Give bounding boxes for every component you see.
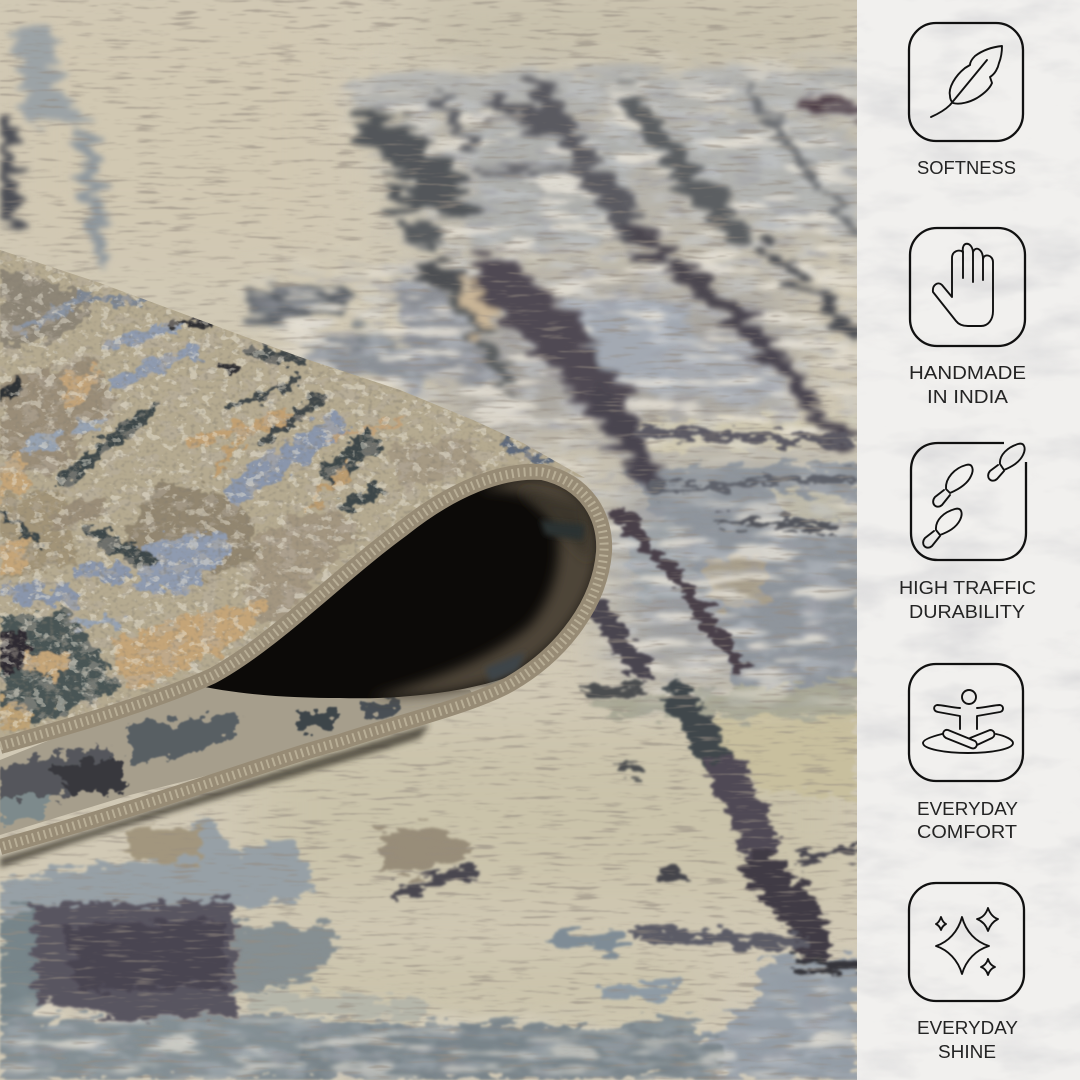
label: SOFTNESS — [917, 158, 1016, 178]
underside flap — [0, 680, 480, 835]
near dark streaks — [35, 432, 857, 1020]
label: EVERYDAY — [917, 799, 1018, 819]
label: HANDMADE — [909, 363, 1026, 383]
dark patches — [0, 610, 122, 722]
far dark streaks — [375, 93, 857, 480]
feature: high traffic durability: DURABILITY — [909, 602, 1025, 622]
feature: handmade in india: IN INDIA — [927, 387, 1008, 407]
knot mottling — [0, 268, 542, 730]
inner lining of roll — [370, 477, 598, 698]
far rug patches — [0, 25, 860, 405]
feature: everyday comfort — [909, 664, 1023, 842]
icon: hand — [910, 228, 1025, 346]
rolled rug corner — [0, 240, 604, 868]
icon: sparkles — [909, 883, 1024, 1001]
soft tonal zones — [269, 14, 857, 1004]
flat rug surface — [0, 0, 860, 1080]
rug edge binding — [0, 472, 604, 847]
feature: high traffic durability — [899, 443, 1036, 622]
roll top surface — [0, 240, 600, 760]
feature: everyday shine — [909, 883, 1024, 1062]
tan shade patches — [0, 270, 100, 345]
feature: handmade in india — [909, 228, 1026, 407]
feature: softness — [909, 23, 1023, 178]
label: EVERYDAY — [917, 1018, 1018, 1038]
blue patches — [135, 530, 235, 592]
feature: everyday shine: SHINE — [938, 1042, 996, 1062]
panel: features sidebar — [857, 0, 1080, 1080]
icon: meditating figure — [909, 664, 1023, 781]
feature: everyday comfort: COMFORT — [917, 822, 1017, 842]
icon: feather — [909, 23, 1023, 141]
pile texture — [0, 640, 857, 1080]
mosaic weave breakup — [0, 0, 857, 1080]
label: HIGH TRAFFIC — [899, 578, 1036, 598]
orange patches — [110, 600, 272, 692]
roll interior shadow — [190, 475, 598, 698]
shadow under rolled edge — [0, 724, 430, 868]
icon: footprints — [911, 443, 1026, 560]
near rug patches — [0, 415, 860, 1080]
